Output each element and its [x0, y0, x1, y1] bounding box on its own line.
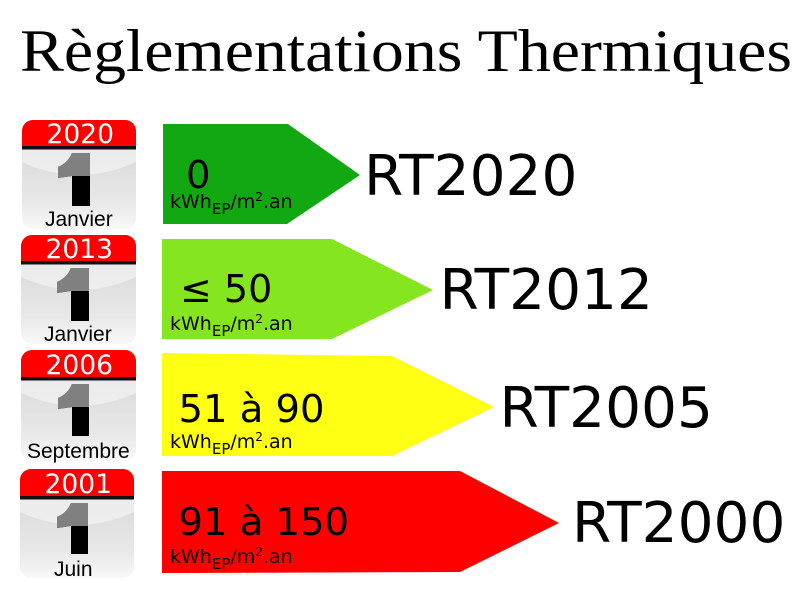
unit: kWh	[170, 546, 212, 568]
unit: kWh	[170, 431, 212, 453]
unit: EP	[212, 200, 230, 218]
unit: kWh	[170, 191, 212, 213]
label: RT2000: RT2000	[572, 491, 785, 556]
unit: EP	[212, 555, 230, 573]
icon: calendar 2020	[22, 119, 136, 231]
unit: /m	[230, 546, 255, 568]
unit: EP	[212, 322, 230, 340]
unit: .an	[263, 313, 293, 335]
icon: calendar 2013: 2013	[46, 234, 113, 265]
row: RT2005	[21, 350, 713, 463]
icon: calendar 2013	[21, 234, 136, 346]
unit: kWh	[170, 313, 212, 335]
icon: calendar 2006: Septembre	[27, 440, 130, 463]
title: Règlementations Thermiques	[20, 18, 792, 84]
unit: 2	[255, 312, 263, 326]
icon: calendar 2001: 2001	[44, 469, 112, 500]
unit: 2	[255, 430, 263, 444]
arrow: light green	[162, 239, 433, 339]
icon: calendar 2020: Janvier	[45, 208, 113, 231]
unit: .an	[263, 546, 293, 568]
unit: 2	[255, 190, 263, 204]
icon: calendar 2006	[21, 350, 136, 463]
arrow: yellow	[162, 353, 494, 456]
arrow: green	[163, 124, 360, 224]
value: ≤ 50: ≤ 50	[180, 267, 272, 311]
value: 0: 0	[186, 153, 210, 198]
row: RT2020	[22, 119, 577, 231]
unit: /m	[230, 313, 255, 335]
icon: calendar 2001	[20, 469, 134, 581]
unit: EP	[212, 440, 230, 458]
arrow: red	[162, 471, 559, 573]
unit: .an	[263, 431, 293, 453]
unit: /m	[230, 191, 255, 213]
icon: calendar 2020: 2020	[46, 119, 114, 150]
label: RT2020: RT2020	[364, 144, 577, 209]
label: RT2005: RT2005	[500, 376, 713, 441]
value: 91 à 150: 91 à 150	[178, 500, 349, 545]
unit: 2	[255, 545, 263, 559]
row: RT2000	[20, 469, 785, 581]
unit: /m	[230, 431, 255, 453]
row: RT2012	[21, 234, 653, 346]
value: 51 à 90: 51 à 90	[178, 387, 325, 432]
icon: calendar 2013: Janvier	[44, 323, 112, 346]
label: RT2012: RT2012	[440, 258, 653, 323]
unit: .an	[263, 191, 293, 213]
icon: calendar 2006: 2006	[46, 350, 113, 381]
icon: calendar 2001: Juin	[54, 558, 93, 581]
